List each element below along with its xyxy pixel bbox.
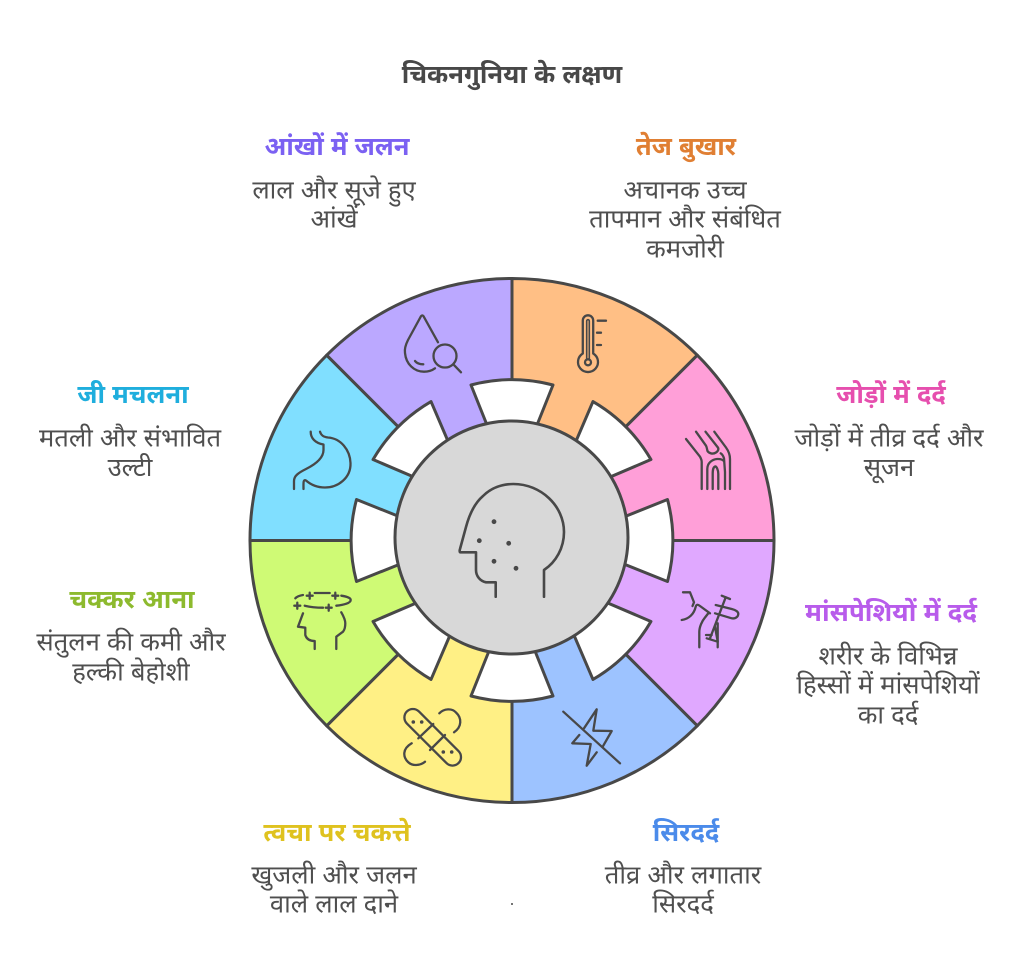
icon: no headache bolt [563,709,620,766]
segment: fever [512,278,697,540]
center circle [395,421,628,654]
label: muscle pain: शरीर के विभिन्न [819,640,958,670]
label: eye burning: आंखें [310,204,359,234]
icon: dizzy head [294,593,351,649]
segment: skin rash [327,540,512,802]
label: dizziness: चक्कर आना [69,586,195,614]
icon: knee joint [686,432,730,489]
icon: head with spots [460,484,564,597]
label: nausea [39,380,221,482]
small dot [511,903,513,905]
label: joint pain: जोड़ों में दर्द [836,380,947,409]
label: skin rash: वाले लाल दाने [270,888,399,918]
segment: dizziness [250,540,512,726]
label: high fever: तापमान और संबंधित [589,204,781,234]
label: muscle pain: मांसपेशियों में दर्द [805,597,978,627]
icon: drop with magnifier [405,315,461,372]
label: headache: सिरदर्द [653,818,720,847]
label: nausea: उल्टी [108,453,153,482]
label: headache [605,818,762,918]
label: skin rash: खुजली और जलन [251,860,417,890]
label: high fever: कमजोरी [646,234,724,264]
icon: muscle syringe [682,592,738,647]
icon: bandage [401,705,465,769]
label: skin rash: त्वचा पर चकत्ते [263,818,412,847]
label: joint pain: सूजन [864,454,915,483]
label: joint pain [795,380,984,483]
white notches [351,380,673,701]
label: muscle pain: का दर्द [858,700,919,730]
label: skin rash [251,818,417,918]
icon: stomach [294,432,351,489]
segment: joint pain [512,355,774,540]
label: muscle pain [796,597,980,730]
label: nausea: मतली और संभावित [39,424,221,452]
label: dizziness: हल्की बेहोशी [72,656,190,686]
segment: nausea [250,355,512,540]
label: nausea: जी मचलना [77,380,189,409]
label: high fever: तेज बुखार [636,132,737,162]
icon: thermometer [578,315,606,372]
label: headache: तीव्र और लगातार [605,860,762,890]
segment: eye burning [327,278,512,540]
label: high fever [589,132,781,264]
wheel diagram [250,278,774,802]
label: eye burning: लाल और सूजे हुए [252,174,417,208]
segment: muscle pain [512,540,774,726]
label: high fever: अचानक उच्च [623,176,747,204]
segment: headache [512,540,697,802]
label: eye burning: आंखों में जलन [265,132,411,161]
label: eye burning [252,132,417,234]
title: चिकनगुनिया के लक्षण [402,60,623,90]
label: headache: सिरदर्द [652,890,715,918]
label: dizziness: संतुलन की कमी और [36,628,226,658]
label: muscle pain: हिस्सों में मांसपेशियों [796,670,980,700]
label: joint pain: जोड़ों में तीव्र दर्द और [795,424,984,452]
label: dizziness [36,586,226,686]
